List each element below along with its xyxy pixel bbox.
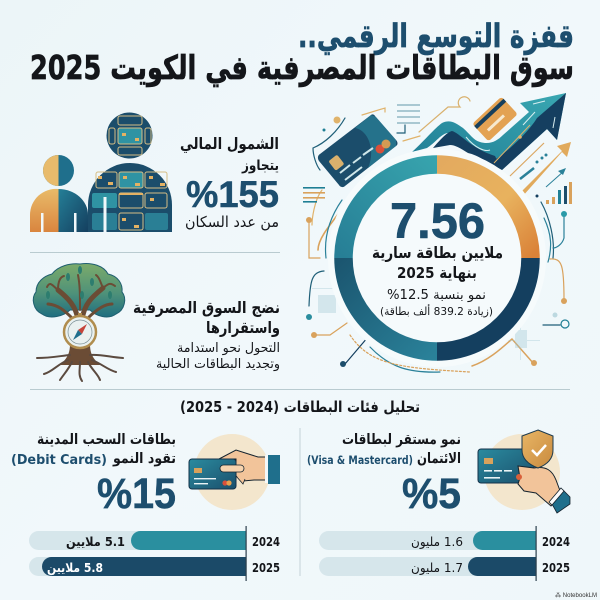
bar chart: credit cards: 1.7 مليون (411, 560, 463, 576)
text: credit heading (342, 432, 461, 467)
text: growth: (زيادة 839.2 ألف بطاقة) (380, 304, 493, 318)
bar chart: debit cards: 2024 (252, 535, 280, 549)
text: maturity heading (133, 298, 280, 337)
text: debit heading (37, 432, 176, 467)
divider (30, 389, 570, 390)
bar chart: debit cards (29, 526, 280, 581)
panel: market maturity (33, 263, 280, 381)
bar chart: credit cards: 2024 (542, 535, 570, 549)
panel: debit cards (11, 432, 280, 581)
panel: financial inclusion (30, 112, 279, 233)
text: of population: من عدد السكان (185, 213, 279, 231)
text: credit heading: نمو مستقر لبطاقات (342, 432, 461, 448)
icon: hand with debit card (189, 434, 280, 510)
text: total cards value: 7.56 (390, 193, 485, 249)
text: maturity body: وتجديد البطاقات الحالية (156, 357, 280, 372)
icon: small gold arrow and mini chart (510, 142, 572, 204)
text: maturity body: التحول نحو استدامة (177, 341, 280, 356)
divider (30, 252, 280, 253)
icon: people made of cards (30, 112, 172, 233)
title (30, 17, 574, 88)
text: maturity body (156, 341, 280, 372)
section heading: تحليل فئات البطاقات (2024 - 2025) (180, 398, 420, 416)
bar chart: debit cards: 5.1 ملايين (66, 534, 125, 549)
bar chart: credit cards: 1.6 مليون (411, 534, 463, 550)
text: total cards label: ملايين بطاقة سارية (372, 243, 503, 262)
vertical divider (300, 428, 301, 576)
decorations (309, 97, 564, 372)
icon: tilted credit card (318, 114, 398, 187)
icon: gold card (472, 97, 518, 141)
text: maturity heading: واستقرارها (206, 318, 280, 337)
bar chart: debit cards: 2025 (252, 561, 280, 575)
text: debit heading: تقود النمو (112, 451, 176, 467)
chart: ring (331, 152, 543, 364)
text: growth (380, 288, 493, 318)
bar chart: debit cards: 5.8 ملايين (47, 560, 103, 575)
text: growth: نمو بنسبة 12.5% (387, 288, 486, 303)
text: total cards label (372, 243, 503, 282)
text: total cards label: بنهاية 2025 (397, 264, 477, 282)
text: 15 percent: %15 (97, 470, 176, 518)
text: financial inclusion heading: الشمول المالي (180, 134, 279, 154)
text: debit heading: بطاقات السحب المدينة (37, 432, 176, 448)
text: 155 percent: %155 (186, 174, 279, 215)
icon: rising arrow (412, 93, 566, 170)
icon: tree with compass (33, 263, 125, 381)
text: Visa and Mastercard: (Visa & Mastercard) (307, 453, 413, 467)
text: maturity heading: نضج السوق المصرفية (133, 298, 280, 317)
text: 5 percent: %5 (402, 470, 461, 518)
panel: credit cards (307, 430, 570, 581)
text: Debit Cards: (Debit Cards) (11, 453, 107, 468)
logo: NotebookLM: ⁂ NotebookLM (555, 593, 597, 599)
text: exceeds: يتجاوز (241, 158, 279, 174)
bar chart: credit cards: 2025 (542, 561, 570, 575)
text: credit heading: الائتمان (417, 451, 461, 467)
icon: hand with credit card and shield (478, 430, 570, 513)
bar chart: credit cards (319, 526, 570, 581)
panel: total cards ring (303, 93, 572, 372)
